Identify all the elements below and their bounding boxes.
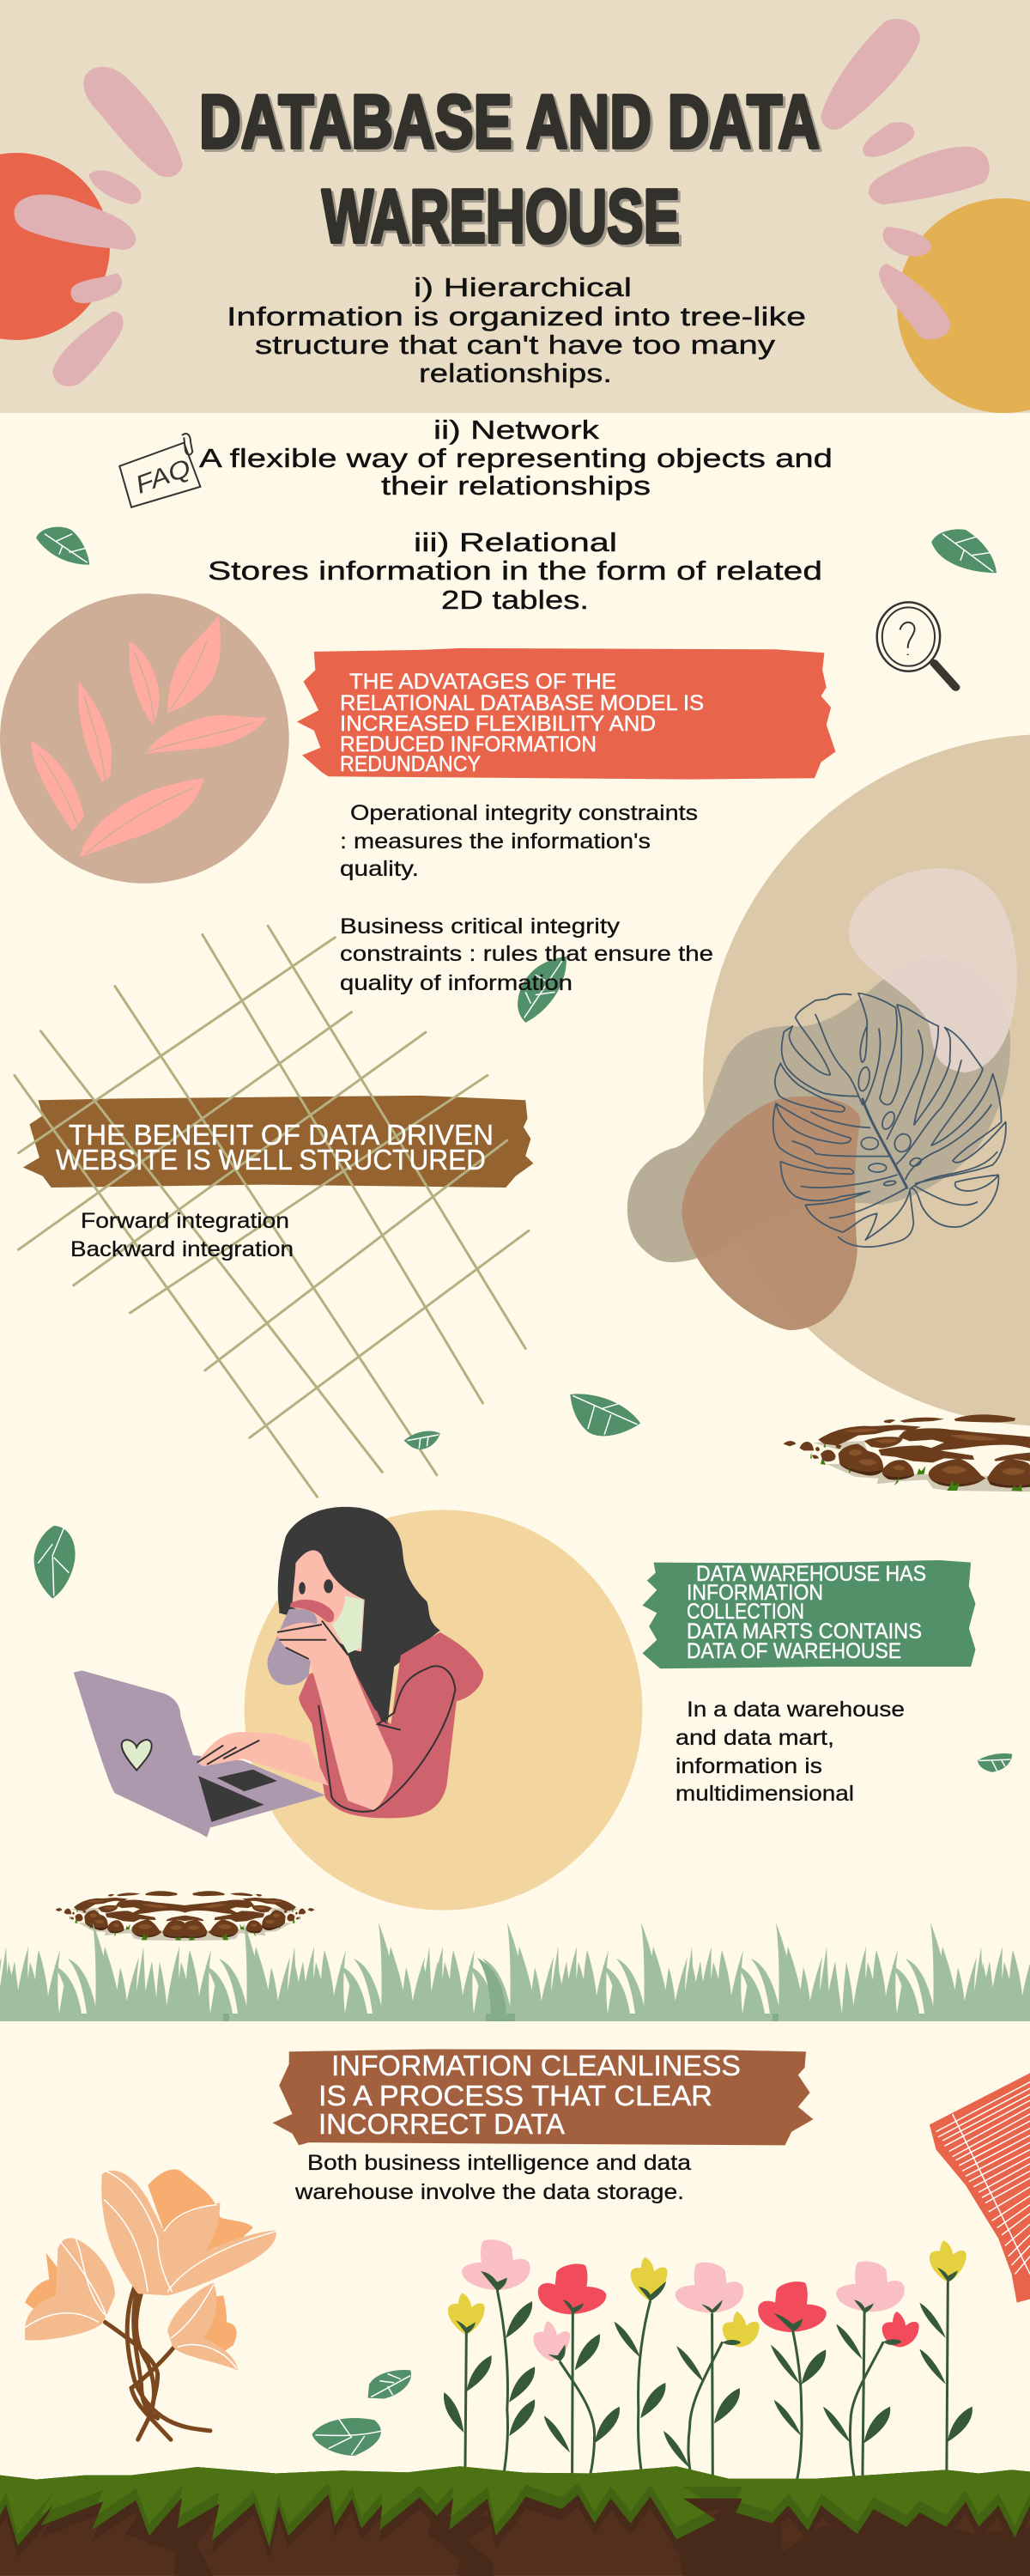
icon: leaf bottom upper [368,2370,411,2399]
text block: multidimensional: information is [676,1754,822,1778]
title [199,79,820,258]
flower stems [465,2281,948,2482]
text block: integrity constraints: constraints : rules that ensure the [340,942,713,966]
text block: data storage [294,2151,691,2204]
icon: leaf top left [36,527,89,565]
hierarchical model: i) Hierarchical [414,272,632,302]
text block: integrity constraints: : measures the information's [340,829,651,854]
relational model: 2D tables. [441,585,589,615]
banner: data driven website: WEBSITE IS WELL STRUCTURED [56,1144,486,1176]
icon: FAQ note [119,434,200,507]
banner: information cleanliness: INFORMATION CLEANLINESS [331,2050,741,2081]
relational model: Stores information in the form of related [208,556,822,586]
banner: data driven website [15,926,533,1497]
text block: database models [199,272,833,615]
icon: leaf right [978,1753,1012,1772]
text block: data storage: warehouse involve the data storage. [294,2180,684,2204]
text block: multidimensional: In a data warehouse [687,1698,905,1722]
banner: data warehouse: DATA WAREHOUSE HAS [696,1562,926,1586]
banner: data warehouse: DATA MARTS CONTAINS [687,1619,922,1643]
hierarchical model: Information is organized into tree-like [227,301,806,331]
text block: multidimensional: multidimensional [676,1782,854,1806]
hierarchical model [227,272,806,388]
hierarchical model: relationships. [419,358,612,388]
soil patch left [56,1891,314,1941]
torn coral paper [930,2073,1030,2303]
illustration: woman with laptop [74,1507,642,1911]
relational model [208,527,822,615]
network model: their relationships [381,471,651,501]
banner: relational database advantages: INCREASED FLEXIBILITY AND [340,712,656,736]
banner: relational database advantages: RELATIONAL DATABASE MODEL IS [340,691,704,715]
monstera leaf outline [773,993,1006,1247]
text block: integration: Forward integration [81,1209,289,1233]
text block: data storage: Both business intelligence and data [307,2151,691,2175]
panel: pink circle with leaves [0,593,289,884]
ground: soil and grass [0,2466,1030,2576]
icon: magnifying glass [877,602,956,687]
text block: multidimensional [676,1698,905,1806]
banner: data driven website: THE BENEFIT OF DATA DRIVEN [69,1119,494,1151]
banner: data warehouse: DATA OF WAREHOUSE [687,1639,901,1663]
icon: leaf top right [931,529,997,573]
flower calyxes [456,2268,958,2361]
banner: information cleanliness: IS A PROCESS THAT CLEAR [318,2080,712,2111]
icon: leaf left [34,1526,76,1599]
soil patch right [784,1414,1030,1492]
text block: integrity constraints [340,801,713,995]
banner: relational database advantages [297,648,835,780]
title: WAREHOUSE [322,173,680,258]
text block: integrity constraints: Operational integrity constraints [350,801,698,825]
icon: leaf bottom lower [312,2418,382,2456]
lattice lines [15,926,529,1497]
network model [199,415,833,501]
grass strip [0,1923,1030,2021]
icon: leaf middle [570,1394,640,1436]
banner: data warehouse: INFORMATION [687,1581,823,1605]
network model: A flexible way of representing objects and [199,443,833,473]
text block: integrity constraints: quality of information [340,971,573,995]
banner: relational database advantages: THE ADVATAGES OF THE [349,670,616,694]
icon: leaf over text [518,957,566,1023]
network model: ii) Network [433,415,600,445]
text block: integrity constraints: quality. [340,857,419,881]
text block: integration: Backward integration [70,1237,294,1261]
text block: integration [70,1209,294,1261]
text block: multidimensional: and data mart, [676,1726,834,1750]
icon: FAQ note: FAQ [132,454,195,500]
flower petals [448,2239,966,2361]
relational model: iii) Relational [414,527,617,557]
illustration: beige circle with monstera leaf [627,734,1030,1426]
banner: relational database advantages: REDUNDANCY [340,752,481,776]
header band [0,0,1030,413]
banner: data warehouse [642,1560,975,1668]
banner: relational database advantages: REDUCED INFORMATION [340,732,597,756]
hierarchical model: structure that can't have too many [255,330,776,360]
icon: small leaf [404,1431,440,1449]
banner: data warehouse: COLLECTION [687,1600,804,1624]
flower leaves [444,2301,972,2468]
text block: integrity constraints: Business critical integrity [340,914,621,939]
illustration: peach flower bouquet [25,2169,276,2439]
banner: information cleanliness: INCORRECT DATA [318,2108,565,2140]
title: DATABASE AND DATA [199,79,820,164]
banner: information cleanliness [273,2049,813,2145]
illustration: tulip garden [444,2239,972,2482]
